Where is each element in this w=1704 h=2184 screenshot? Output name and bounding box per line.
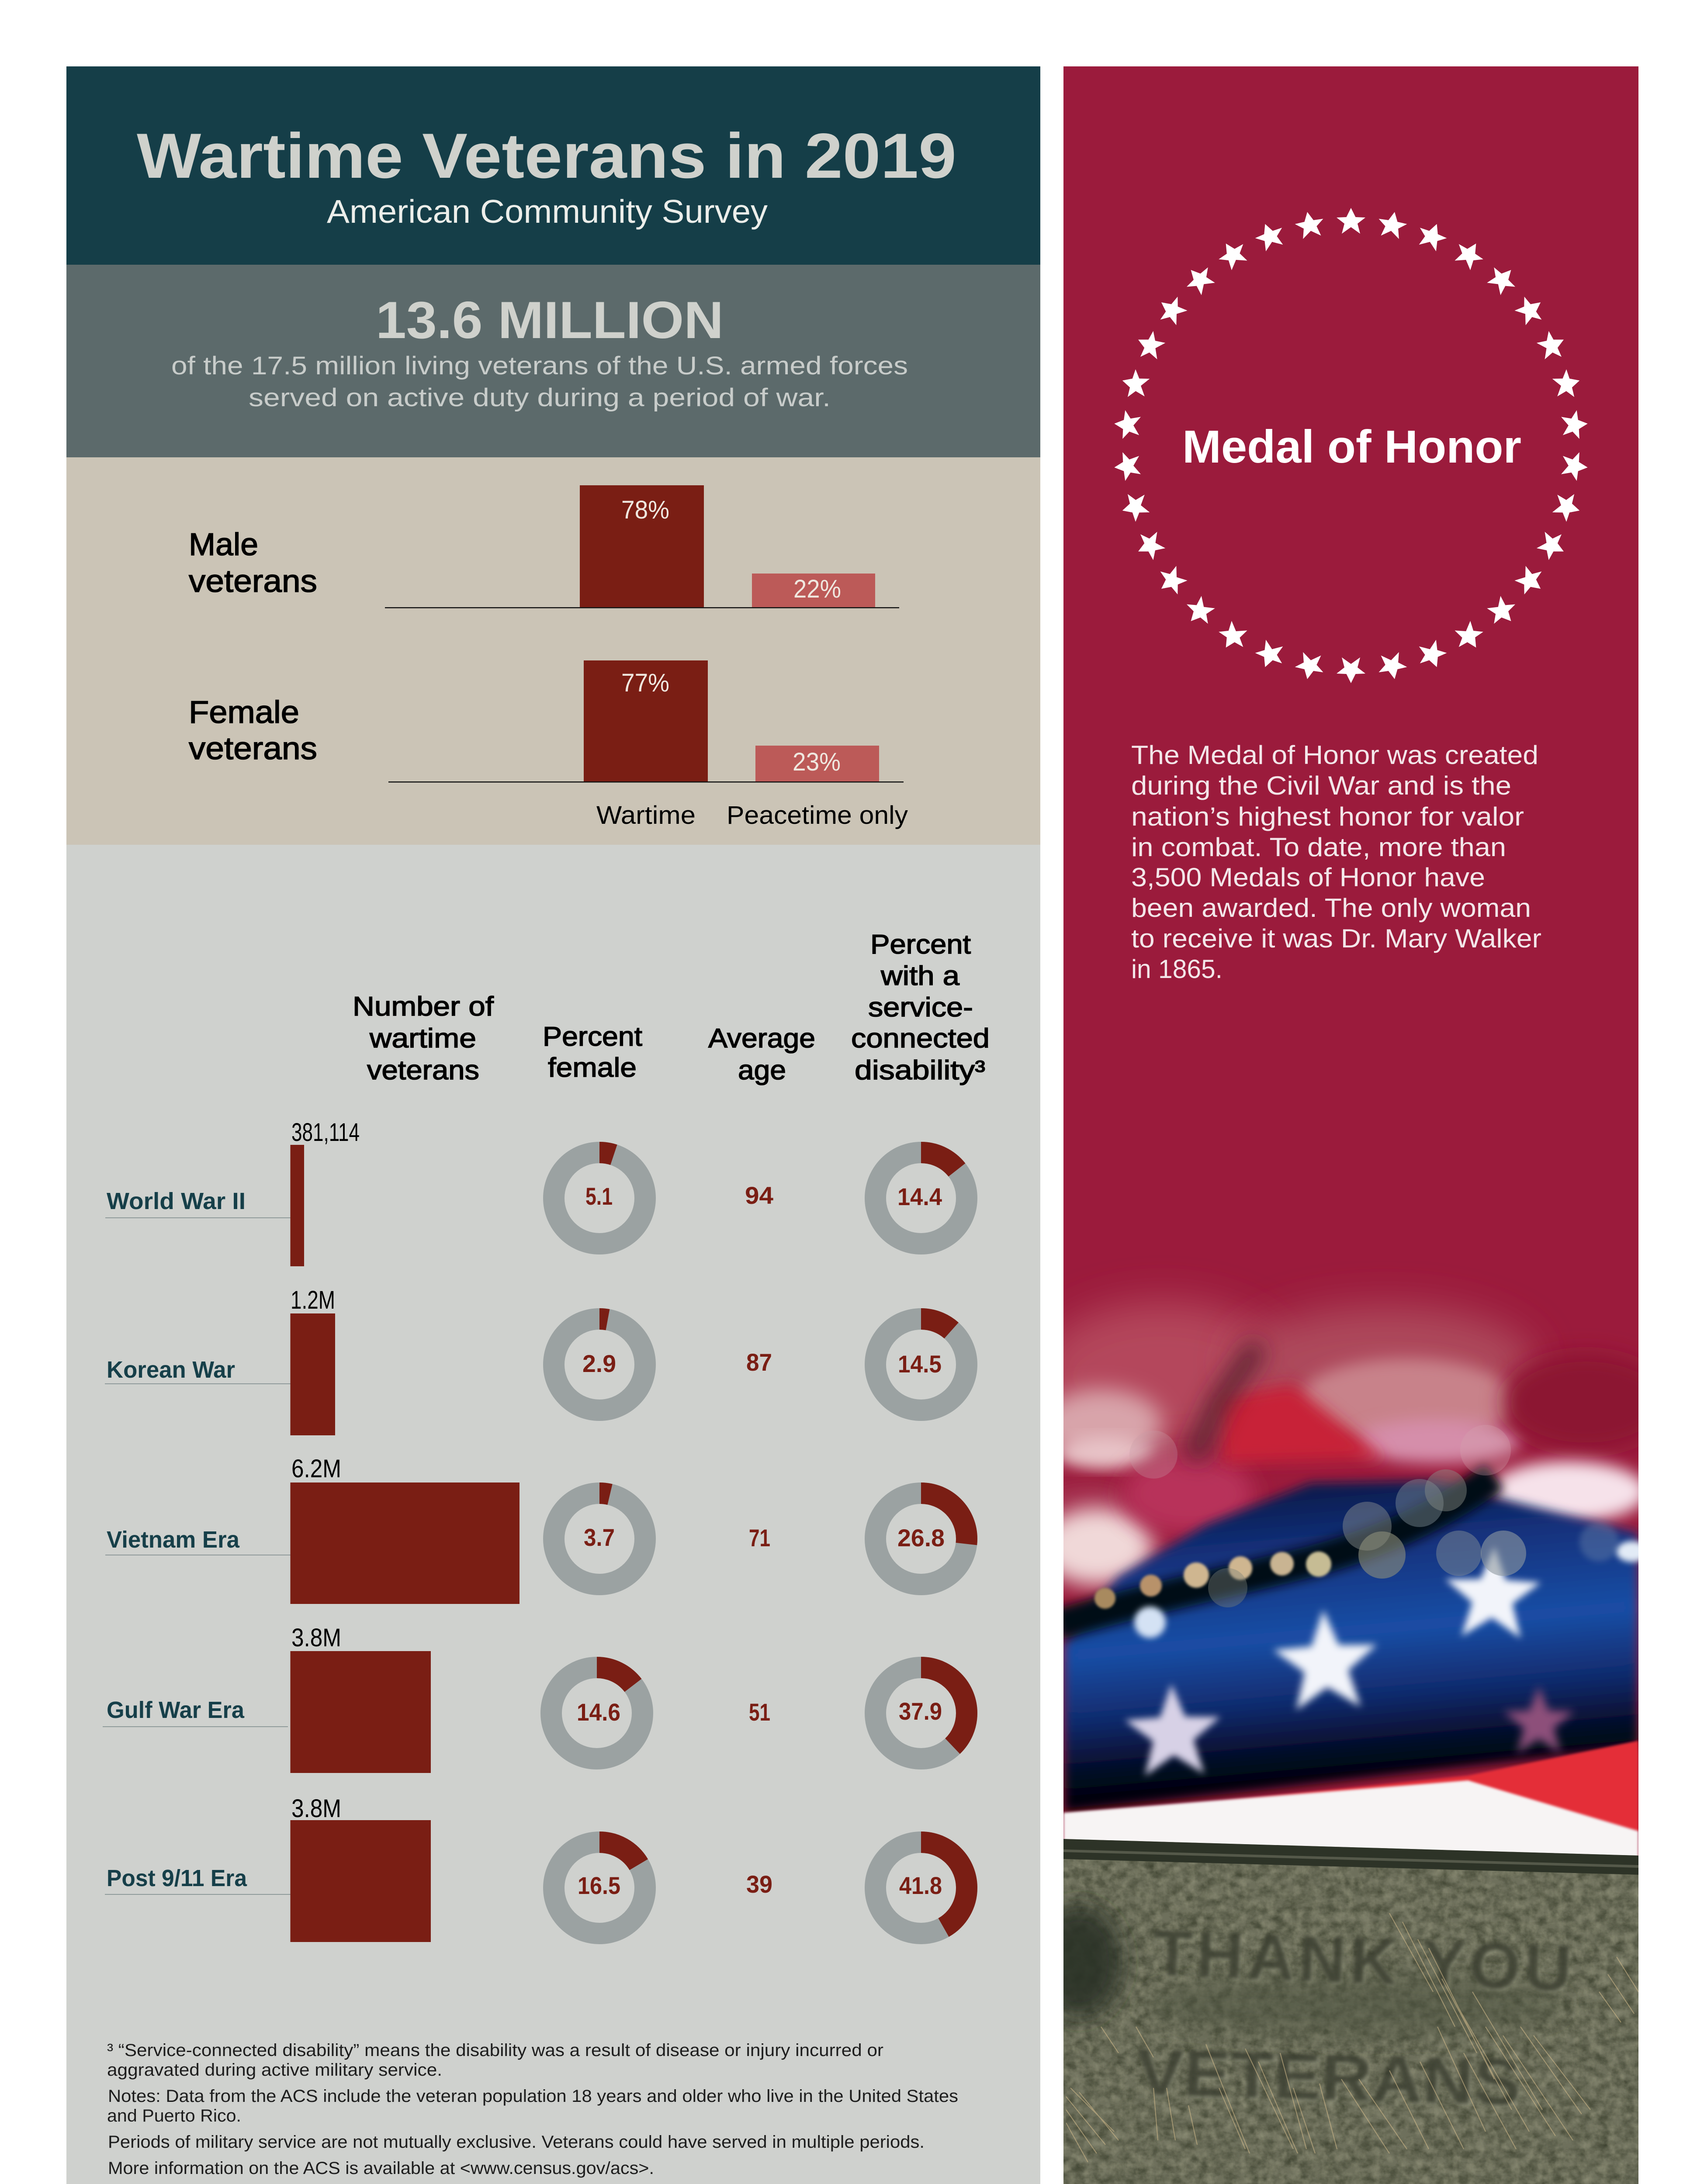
footnotes and source: aggravated during active military service. — [107, 2060, 442, 2080]
column heading: percent with a service-connected disability: service- — [868, 992, 973, 1023]
bar: 3.8M veterans: 3.8M — [291, 1794, 341, 1823]
row label: Post 9/11 Era — [107, 1865, 247, 1891]
label: male veterans: Male — [189, 527, 258, 562]
stamped text: THANK YOU VETERANS: VETERANS — [1136, 2035, 1522, 2119]
bar chart: male veterans: 22% — [793, 575, 841, 603]
panel: header — [66, 66, 1040, 265]
bar chart: male veterans: 78% — [621, 496, 669, 524]
panel: male and female veterans — [66, 457, 1040, 845]
average age 87: 87 — [746, 1348, 772, 1376]
title: Wartime Veterans in 2019 — [137, 120, 956, 191]
row: Korean War — [105, 1286, 966, 1435]
panel: Medal of Honor — [1036, 66, 1669, 2184]
panel: headline statistic — [66, 265, 1040, 457]
bar: 381,114 veterans: 381,114 — [291, 1118, 360, 1147]
bar: 3.8M veterans — [290, 1794, 431, 1942]
bar: 1.2M veterans: 1.2M — [291, 1286, 335, 1314]
donut: percent female 16.5 — [554, 1842, 645, 1933]
legend: wartime and peacetime only — [596, 801, 908, 829]
donut: disability 37.9: 37.9 — [899, 1697, 942, 1725]
donut: percent female 5.1 — [554, 1152, 645, 1244]
metal plate — [1036, 1835, 1638, 2184]
heading: Medal of Honor: Medal of Honor — [1182, 421, 1521, 473]
statistic description: of the 17.5 million living veterans of the U.S. armed forces — [171, 352, 908, 380]
statistic description — [171, 352, 908, 412]
description text: in combat. To date, more than — [1131, 833, 1506, 862]
red and white stripes behind the plate — [1063, 1741, 1638, 1861]
row label: Korean War — [107, 1357, 235, 1383]
average age 51: 51 — [749, 1698, 770, 1726]
column heading: percent with a service-connected disability: Percent — [870, 930, 971, 960]
statistic value: 13.6 MILLION — [376, 291, 724, 349]
description text: The Medal of Honor was created — [1131, 740, 1538, 770]
column heading: average age: age — [738, 1055, 786, 1085]
stamped text: THANK YOU VETERANS — [1136, 1916, 1575, 2122]
donut: percent female 2.9: 2.9 — [582, 1350, 616, 1377]
description text: nation’s highest honor for valor — [1131, 802, 1524, 831]
row: Gulf War Era — [103, 1624, 966, 1773]
legend: wartime and peacetime only: Wartime — [596, 801, 696, 829]
subtitle: American Community Survey — [327, 193, 768, 230]
column heading: number of wartime veterans: wartime — [369, 1023, 476, 1054]
description text: been awarded. The only woman — [1131, 893, 1531, 923]
bar chart: female veterans: 23% — [793, 748, 841, 776]
statistic description: served on active duty during a period of war. — [249, 384, 831, 412]
bar: 1.2M veterans — [290, 1286, 335, 1435]
bar chart: male veterans — [385, 485, 899, 608]
scratches on the plate — [1066, 1913, 1638, 2162]
row: World War II — [105, 1118, 966, 1266]
blue field of the flag — [1064, 1481, 1638, 1813]
row label: Gulf War Era — [107, 1697, 245, 1723]
donut: percent female 14.6 — [551, 1668, 642, 1759]
label: female veterans — [189, 695, 317, 766]
label: male veterans: veterans — [189, 564, 317, 599]
donut: disability 14.5: 14.5 — [898, 1350, 942, 1378]
footnotes and source: ³ “Service-connected disability” means the disability was a result of disease or injury incurred or — [107, 2041, 883, 2060]
average age 94: 94 — [745, 1182, 773, 1209]
description text: 3,500 Medals of Honor have — [1131, 863, 1485, 892]
column heading: number of wartime veterans: veterans — [367, 1055, 479, 1085]
donut: disability 26.8: 26.8 — [897, 1524, 945, 1552]
dark bead chain — [1057, 1476, 1494, 1625]
row label: Vietnam Era — [107, 1527, 240, 1553]
column heading: percent with a service-connected disability — [851, 930, 990, 1085]
donut: disability 14.4 — [876, 1152, 966, 1244]
footnotes and source: and Puerto Rico. — [107, 2106, 241, 2125]
footnotes and source: Notes: Data from the ACS include the veteran population 18 years and older who live in the United States — [108, 2087, 958, 2106]
donut: disability 41.8 — [876, 1842, 966, 1933]
donut: percent female 3.7: 3.7 — [584, 1524, 615, 1551]
footnotes and source: More information on the ACS is available at <www.census.gov/acs>. — [108, 2159, 654, 2178]
average age 71: 71 — [749, 1524, 770, 1552]
row label: World War II — [107, 1188, 246, 1214]
footnotes and source: Periods of military service are not mutually exclusive. Veterans could have served in multiple periods. — [108, 2132, 925, 2152]
icon: ring of stars — [1113, 208, 1589, 683]
donut: disability 14.5 — [876, 1319, 966, 1410]
label: male veterans — [189, 527, 317, 599]
bar chart: female veterans: 77% — [621, 669, 669, 697]
column heading: percent female: female — [548, 1053, 637, 1083]
stamped text: THANK YOU VETERANS: VETERANS — [1137, 2037, 1524, 2122]
legend: wartime and peacetime only: Peacetime only — [727, 801, 908, 829]
donut: percent female 3.7 — [554, 1493, 645, 1585]
column heading: percent female — [543, 1022, 642, 1083]
donut: disability 37.9 — [876, 1668, 966, 1759]
stamped text: THANK YOU VETERANS: THANK YOU — [1151, 1916, 1573, 2005]
column heading: percent female: Percent — [543, 1022, 642, 1052]
row: Vietnam Era — [105, 1455, 966, 1604]
gold beads and bokeh — [1094, 1425, 1619, 1609]
stamped text: THANK YOU VETERANS: THANK YOU — [1153, 1918, 1575, 2008]
description text — [1131, 740, 1541, 984]
column heading: percent with a service-connected disability: disability³ — [855, 1055, 985, 1085]
column heading: percent with a service-connected disability: with a — [880, 961, 960, 991]
average age 39: 39 — [746, 1870, 772, 1898]
bar: 381,114 veterans — [290, 1118, 360, 1266]
description text: to receive it was Dr. Mary Walker — [1131, 924, 1541, 953]
column heading: average age: Average — [708, 1023, 815, 1054]
donut: percent female 5.1: 5.1 — [585, 1182, 613, 1210]
label: female veterans: veterans — [189, 731, 317, 766]
donut: disability 14.4: 14.4 — [897, 1183, 942, 1210]
footnotes and source — [107, 2041, 958, 2184]
bar: 3.8M veterans: 3.8M — [291, 1624, 341, 1652]
panel: wartime periods table — [66, 845, 1040, 2184]
blurred background of the flag — [1036, 1302, 1669, 1586]
column heading: number of wartime veterans: Number of — [353, 992, 494, 1022]
column heading: average age — [708, 1023, 815, 1085]
description text: during the Civil War and is the — [1131, 771, 1511, 800]
flag stars — [1124, 1541, 1648, 1776]
donut: percent female 2.9 — [554, 1319, 645, 1410]
row: Post 9/11 Era — [105, 1794, 966, 1942]
bar: 3.8M veterans — [290, 1624, 431, 1773]
donut: percent female 16.5: 16.5 — [578, 1872, 620, 1899]
donut: percent female 14.6: 14.6 — [577, 1698, 620, 1726]
column heading: number of wartime veterans — [353, 992, 494, 1085]
photo: flag and Thank You Veterans plate — [1036, 1302, 1669, 2184]
donut: disability 26.8 — [876, 1493, 966, 1585]
donut: disability 41.8: 41.8 — [899, 1872, 942, 1899]
label: female veterans: Female — [189, 695, 299, 730]
column heading: percent with a service-connected disability: connected — [851, 1023, 990, 1054]
bar: 6.2M veterans — [290, 1455, 520, 1604]
description text: in 1865. — [1131, 954, 1223, 984]
bar chart: female veterans — [388, 660, 904, 783]
bar: 6.2M veterans: 6.2M — [291, 1455, 341, 1483]
